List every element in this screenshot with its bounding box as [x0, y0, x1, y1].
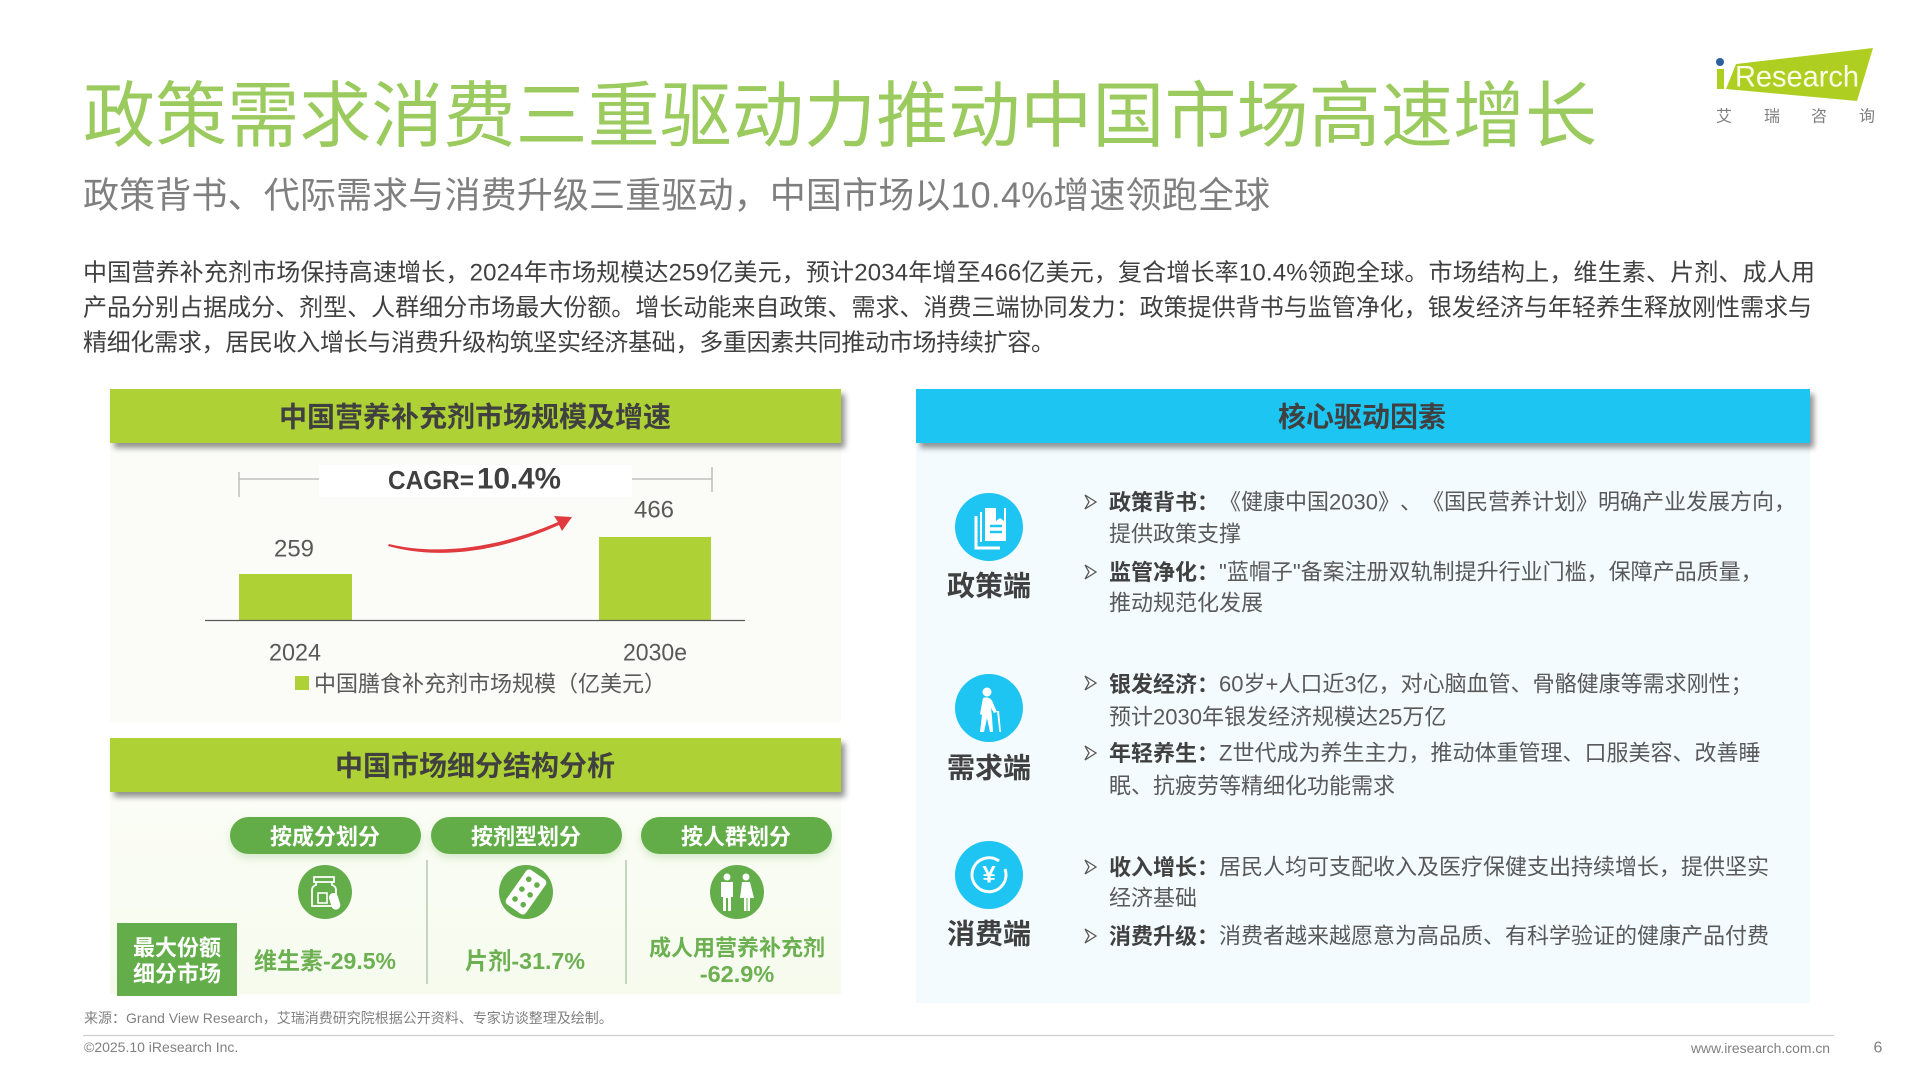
column: by population: 成人用营养补充剂: [649, 935, 825, 960]
bar chart: 2024: [269, 639, 321, 666]
summary text block: [83, 259, 1815, 356]
bar chart: [205, 496, 745, 666]
logo: iResearch: 瑞: [1764, 107, 1780, 125]
text block: consumption bullets: 消费升级：消费者越来越愿意为高品质、有科学验证的健康产品付费: [1109, 923, 1769, 948]
source note: 来源：Grand View Research，艾瑞消费研究院根据公开资料、专家访谈整理及绘制。: [84, 1010, 613, 1026]
bar chart: 2030e: [623, 639, 687, 666]
text block: demand bullets: 年轻养生：Z世代成为养生主力，推动体重管理、口服美容、改善睡: [1109, 740, 1760, 765]
subtitle: 政策背书、代际需求与消费升级三重驱动，中国市场以10.4%增速领跑全球: [83, 174, 1270, 215]
label: consumption side: 消费端: [947, 918, 1031, 949]
panel: core drivers: [916, 389, 1810, 1003]
column: by ingredient: 维生素-29.5%: [254, 948, 396, 974]
text block: policy bullets: 政策背书：《健康中国2030》、《国民营养计划》明确产业发展方向，: [1109, 489, 1796, 514]
heading: market size: [110, 389, 841, 443]
panel: market segmentation: [110, 738, 841, 996]
chart legend: 中国膳食补充剂市场规模（亿美元）: [314, 671, 666, 696]
logo: iResearch: Research: [1735, 60, 1859, 93]
logo: iResearch: 咨: [1811, 107, 1827, 125]
heading: market size: 中国营养补充剂市场规模及增速: [279, 401, 671, 432]
icon: policy document: [955, 493, 1023, 561]
bar chart: 466: [634, 496, 674, 523]
title: 政策需求消费三重驱动力推动中国市场高速增长: [83, 77, 1597, 157]
column: by ingredient: [230, 817, 421, 974]
footer: website: www.iresearch.com.cn: [1690, 1040, 1830, 1056]
text block: policy bullets: 推动规范化发展: [1109, 590, 1263, 615]
text block: policy bullets: 提供政策支撑: [1109, 521, 1241, 546]
label: policy side: 政策端: [947, 570, 1031, 601]
column: by dosage form: 按剂型划分: [471, 824, 581, 849]
label: largest share: [117, 923, 237, 996]
column: by population: [641, 817, 832, 987]
text block: policy bullets: 监管净化："蓝帽子"备案注册双轨制提升行业门槛，保障产品质量，: [1109, 559, 1763, 584]
summary text block: 产品分别占据成分、剂型、人群细分市场最大份额。增长动能来自政策、需求、消费三端协同发力：政策提供背书与监管净化，银发经济与年轻养生释放刚性需求与: [83, 294, 1812, 321]
bar chart: 259: [274, 535, 314, 562]
heading: segmentation: [110, 738, 841, 792]
icon: yen coin: ¥: [982, 861, 996, 888]
page number: 6: [1874, 1039, 1883, 1056]
summary text block: 中国营养补充剂市场保持高速增长，2024年市场规模达259亿美元，预计2034年增至466亿美元，复合增长率10.4%领跑全球。市场结构上，维生素、片剂、成人用: [83, 259, 1815, 286]
text block: demand bullets: 预计2030年银发经济规模达25万亿: [1109, 704, 1446, 729]
footer: copyright: ©2025.10 iResearch Inc.: [84, 1039, 238, 1055]
panel: market size chart: [110, 389, 841, 722]
icon: yen coin: [955, 841, 1023, 909]
CAGR bracket: [239, 462, 712, 497]
heading: core drivers: [916, 389, 1810, 443]
logo: iResearch: 艾: [1716, 107, 1732, 125]
heading: segmentation: 中国市场细分结构分析: [335, 750, 615, 781]
column: by dosage form: [431, 817, 622, 974]
label: largest share: 细分市场: [133, 961, 221, 986]
text block: consumption bullets: [1085, 854, 1769, 948]
column: by population: -62.9%: [700, 961, 774, 987]
text block: demand bullets: [1085, 671, 1760, 798]
logo: iResearch: [1716, 48, 1875, 125]
text block: consumption bullets: 收入增长：居民人均可支配收入及医疗保健支出持续增长，提供坚实: [1109, 854, 1769, 879]
CAGR bracket: CAGR=: [388, 465, 474, 495]
column: by ingredient: 按成分划分: [270, 824, 380, 849]
column: by population: 按人群划分: [681, 824, 791, 849]
text block: consumption bullets: 经济基础: [1109, 885, 1197, 910]
text block: demand bullets: 眠、抗疲劳等精细化功能需求: [1109, 773, 1395, 798]
arrow: growth trend: [388, 516, 572, 553]
summary text block: 精细化需求，居民收入增长与消费升级构筑坚实经济基础，多重因素共同推动市场持续扩容。: [83, 329, 1055, 356]
column: by dosage form: 片剂-31.7%: [465, 948, 585, 974]
CAGR bracket: 10.4%: [477, 462, 561, 495]
text block: demand bullets: 银发经济：60岁+人口近3亿，对心脑血管、骨骼健康等需求刚性；: [1109, 671, 1753, 696]
icon: elderly person: [955, 674, 1023, 742]
heading: core drivers: 核心驱动因素: [1278, 401, 1446, 432]
label: demand side: 需求端: [947, 752, 1031, 783]
text block: policy bullets: [1085, 489, 1796, 615]
logo: iResearch: 询: [1859, 107, 1875, 125]
label: largest share: 最大份额: [133, 935, 221, 960]
